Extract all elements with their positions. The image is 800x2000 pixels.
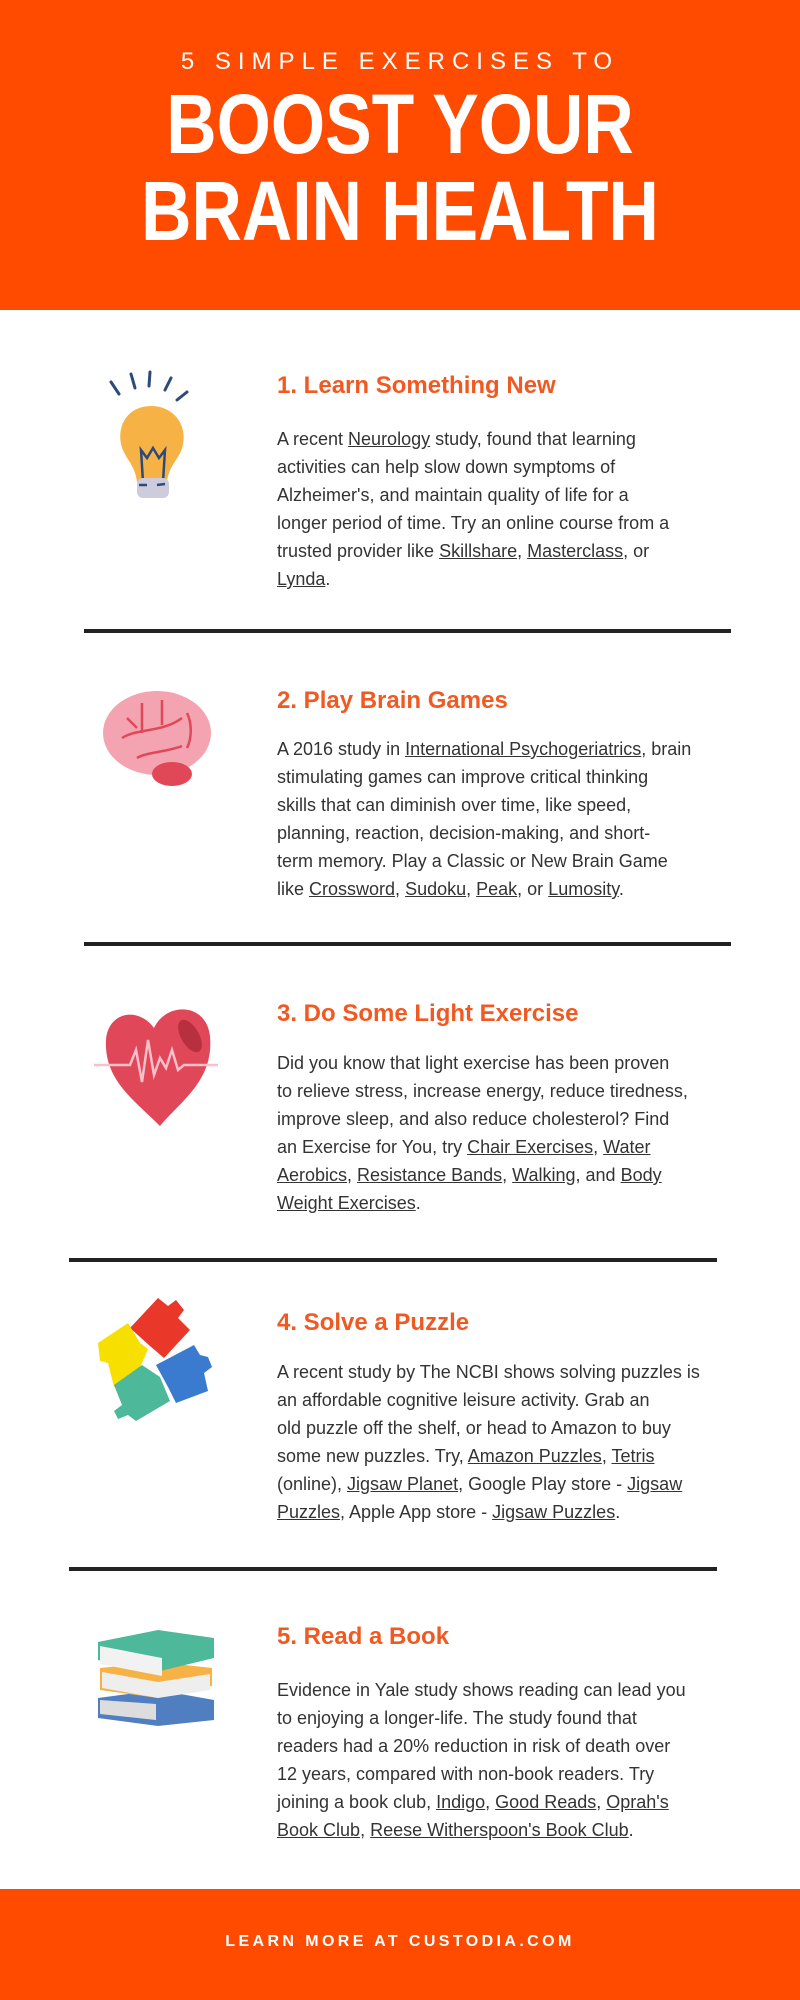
body 4: old puzzle off the shelf, or head to Amazon to buy — [277, 1418, 671, 1438]
icon: books — [98, 1630, 214, 1726]
body 4 — [277, 1362, 700, 1522]
body 5: Evidence in Yale study shows reading can lead you — [277, 1680, 686, 1700]
body 2: skills that can diminish over time, like speed, — [277, 795, 631, 815]
body 4: A recent study by The NCBI shows solving puzzles is — [277, 1362, 700, 1382]
body 3: to relieve stress, increase energy, reduce tiredness, — [277, 1081, 688, 1101]
footer — [0, 1889, 800, 2000]
body 1: longer period of time. Try an online course from a — [277, 513, 669, 533]
subtitle: 5 SIMPLE EXERCISES TO — [181, 48, 619, 75]
icon: puzzle — [98, 1298, 212, 1421]
body 4: (online), Jigsaw Planet, Google Play store - Jigsaw — [277, 1474, 682, 1494]
body 1: Alzheimer's, and maintain quality of life for a — [277, 485, 629, 505]
heading 4: 4. Solve a Puzzle — [277, 1309, 469, 1336]
body 5: Book Club, Reese Witherspoon's Book Club. — [277, 1820, 634, 1840]
heading 5: 5. Read a Book — [277, 1623, 449, 1650]
body 2: like Crossword, Sudoku, Peak, or Lumosity. — [277, 879, 624, 899]
body 4: Puzzles, Apple App store - Jigsaw Puzzles. — [277, 1502, 620, 1522]
heading 3: 3. Do Some Light Exercise — [277, 1000, 578, 1027]
body 4: some new puzzles. Try, Amazon Puzzles, Tetris — [277, 1446, 655, 1466]
heading 1: 1. Learn Something New — [277, 372, 556, 399]
icon: heart — [94, 1009, 218, 1126]
body 1: A recent Neurology study, found that learning — [277, 429, 636, 449]
footer text: LEARN MORE AT CUSTODIA.COM — [225, 1933, 575, 1950]
title line 1: BOOST YOUR — [166, 77, 634, 171]
body 1: Lynda. — [277, 569, 330, 589]
body 5 — [276, 1680, 686, 1840]
body 2: term memory. Play a Classic or New Brain Game — [277, 851, 668, 871]
body 2: A 2016 study in International Psychogeriatrics, brain — [277, 739, 691, 759]
icon: light bulb — [109, 370, 189, 498]
body 5: readers had a 20% reduction in risk of death over — [277, 1736, 670, 1756]
icon: brain — [103, 691, 211, 786]
body 2: stimulating games can improve critical thinking — [277, 767, 648, 787]
body 5: joining a book club, Indigo, Good Reads, Oprah's — [277, 1792, 669, 1812]
header banner — [0, 0, 800, 310]
body 3 — [277, 1053, 688, 1213]
body 4: an affordable cognitive leisure activity. Grab an — [277, 1390, 650, 1410]
body 1: activities can help slow down symptoms of — [277, 457, 615, 477]
body 5: 12 years, compared with non-book readers. Try — [277, 1764, 654, 1784]
body 3: Aerobics, Resistance Bands, Walking, and Body — [277, 1165, 662, 1185]
heading 2: 2. Play Brain Games — [277, 687, 508, 714]
body 3: Weight Exercises. — [277, 1193, 421, 1213]
body 3: an Exercise for You, try Chair Exercises, Water — [277, 1137, 651, 1157]
body 1 — [277, 429, 670, 589]
body 2: planning, reaction, decision-making, and short- — [277, 823, 650, 843]
title line 2: BRAIN HEALTH — [141, 164, 659, 258]
body 2 — [277, 739, 691, 899]
body 3: Did you know that light exercise has been proven — [277, 1053, 669, 1073]
body 1: trusted provider like Skillshare, Masterclass, or — [277, 541, 649, 561]
body 3: improve sleep, and also reduce cholesterol? Find — [277, 1109, 669, 1129]
body 5: to enjoying a longer-life. The study found that — [277, 1708, 637, 1728]
